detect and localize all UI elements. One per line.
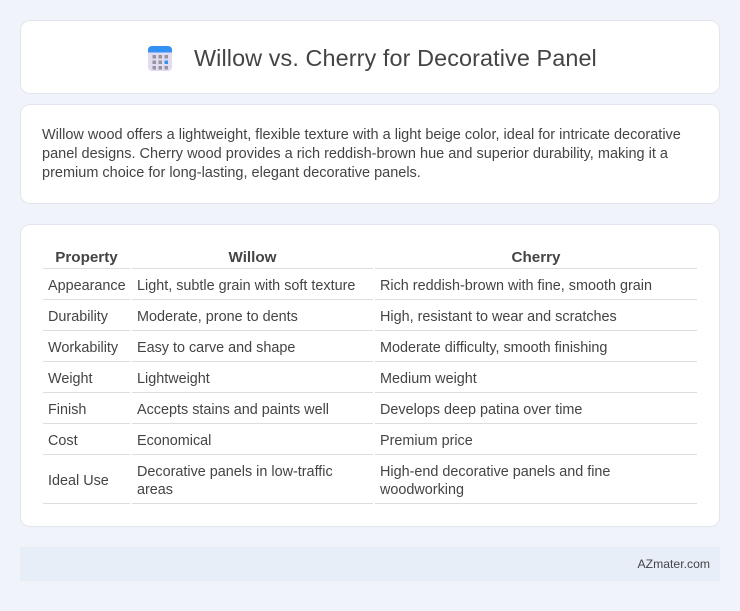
row: Appearance [48, 278, 652, 294]
header: Willow: Willow [229, 249, 276, 266]
row: Ideal Use: Ideal Use [48, 473, 109, 489]
row: Durability: Moderate, prone to dents [137, 309, 298, 325]
row: Durability: Durability [48, 309, 108, 325]
footer credit: AZmater.com [638, 557, 710, 571]
row: Cost: Cost [48, 433, 78, 449]
row: Weight: Lightweight [137, 371, 210, 387]
row: Ideal Use: areas [137, 482, 173, 498]
intro text: panel designs. Cherry wood provides a rich reddish-brown hue and superior durability, making it a [42, 146, 668, 162]
intro text: Willow wood offers a lightweight, flexible texture with a light beige color, ideal for intricate decorative [42, 127, 681, 143]
row: Ideal Use [48, 464, 610, 498]
row: Appearance: Appearance [48, 278, 126, 294]
row: Cost: Premium price [380, 433, 473, 449]
row: Weight [48, 371, 477, 387]
panel: comparison table card [20, 224, 720, 527]
row: Workability: Easy to carve and shape [137, 340, 295, 356]
footer bar [20, 547, 720, 581]
row: Ideal Use: Decorative panels in low-traffic [137, 464, 333, 480]
icon: calendar [148, 46, 172, 71]
row: Workability [48, 340, 607, 356]
header: Cherry: Cherry [512, 249, 560, 266]
row: Cost [48, 433, 473, 449]
title: Willow vs. Cherry for Decorative Panel [194, 45, 597, 71]
panel: title card [20, 20, 720, 94]
row: Cost: Economical [137, 433, 211, 449]
panel: intro card [20, 104, 720, 204]
row: Appearance: Light, subtle grain with soft texture [137, 278, 355, 294]
row: Weight: Medium weight [380, 371, 477, 387]
row: Durability: High, resistant to wear and scratches [380, 309, 617, 325]
row: Finish: Develops deep patina over time [380, 402, 582, 418]
row: Workability: Moderate difficulty, smooth finishing [380, 340, 607, 356]
header: Property: Property [55, 249, 118, 266]
row: Finish [48, 402, 582, 418]
row: Finish: Finish [48, 402, 86, 418]
row: Durability [48, 309, 617, 325]
row: Ideal Use: woodworking [380, 482, 464, 498]
row: Workability: Workability [48, 340, 118, 356]
row: Weight: Weight [48, 371, 93, 387]
row: Finish: Accepts stains and paints well [137, 402, 329, 418]
row: Appearance: Rich reddish-brown with fine, smooth grain [380, 278, 652, 294]
row: Ideal Use: High-end decorative panels and fine [380, 464, 610, 480]
intro text: premium choice for long-lasting, elegant decorative panels. [42, 165, 421, 181]
intro text [42, 127, 681, 181]
